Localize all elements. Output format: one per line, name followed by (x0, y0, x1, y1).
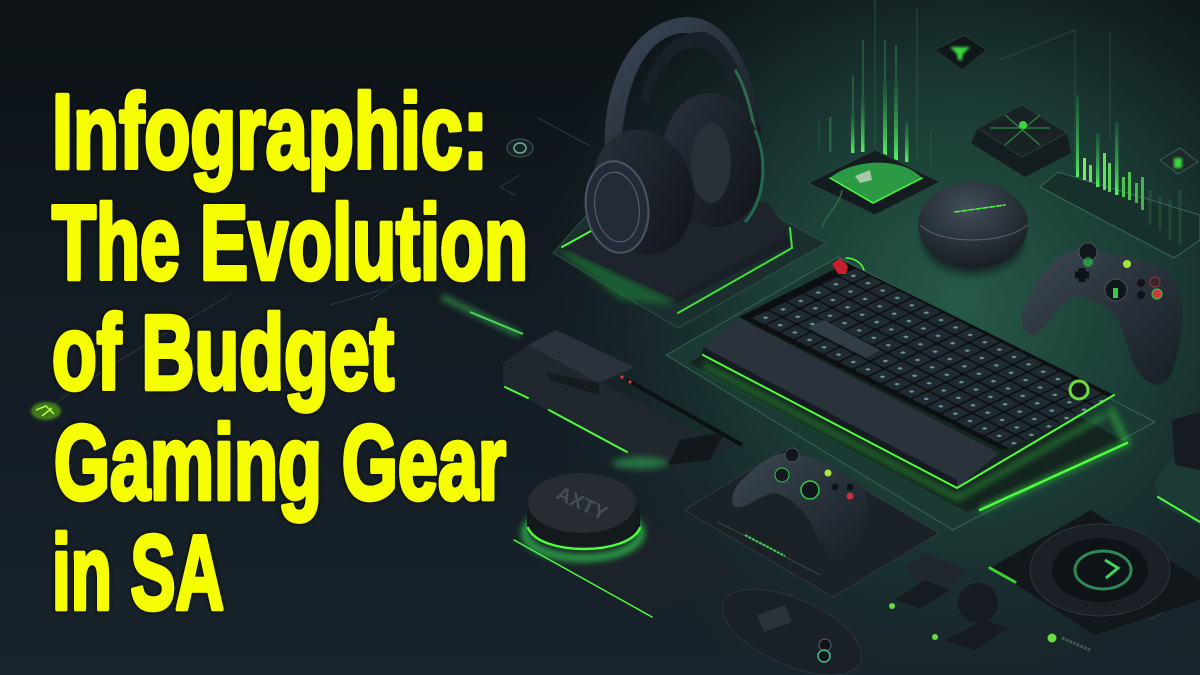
icon: mouse (710, 571, 874, 675)
title: of Budget (52, 294, 394, 412)
icon: round puck (525, 473, 641, 558)
icon: console with stick (442, 297, 742, 469)
icon: small target left (507, 139, 533, 157)
icon: right edge device (1155, 412, 1200, 525)
panel: controller mouse mat (684, 446, 939, 597)
title: Gaming Gear (54, 404, 506, 522)
icon: small funnel tile (935, 35, 987, 70)
icon: dome speaker (918, 182, 1028, 274)
icon: round puck: AXTY (553, 483, 611, 525)
icon: small joystick figure (889, 553, 1008, 650)
icon: fan tile (971, 105, 1071, 177)
panel: headphone stand (553, 175, 826, 328)
panel: keyboard base (666, 257, 1155, 530)
panel: puck pad (514, 517, 735, 617)
title: The Evolution (52, 184, 528, 302)
icon: disc tile (990, 510, 1200, 635)
icon: controller top right (1022, 243, 1182, 385)
title: Infographic: (52, 73, 488, 191)
panel: right glass panel (1040, 172, 1200, 258)
title: in SA (52, 514, 224, 632)
icon: green emblem left (31, 402, 61, 420)
icon: headphones (579, 17, 772, 265)
icon: keyboard (739, 258, 1114, 450)
title (52, 73, 528, 632)
bar chart: right green equalizer (1076, 95, 1180, 245)
icon: wrist rest (703, 318, 1114, 488)
icon: green glowing tile (808, 150, 940, 228)
icon: small tile far right (1160, 148, 1198, 174)
icon: controller centre (718, 448, 868, 575)
icon: small green logo (1048, 634, 1090, 650)
bar chart: central green equalizer (819, 0, 931, 165)
